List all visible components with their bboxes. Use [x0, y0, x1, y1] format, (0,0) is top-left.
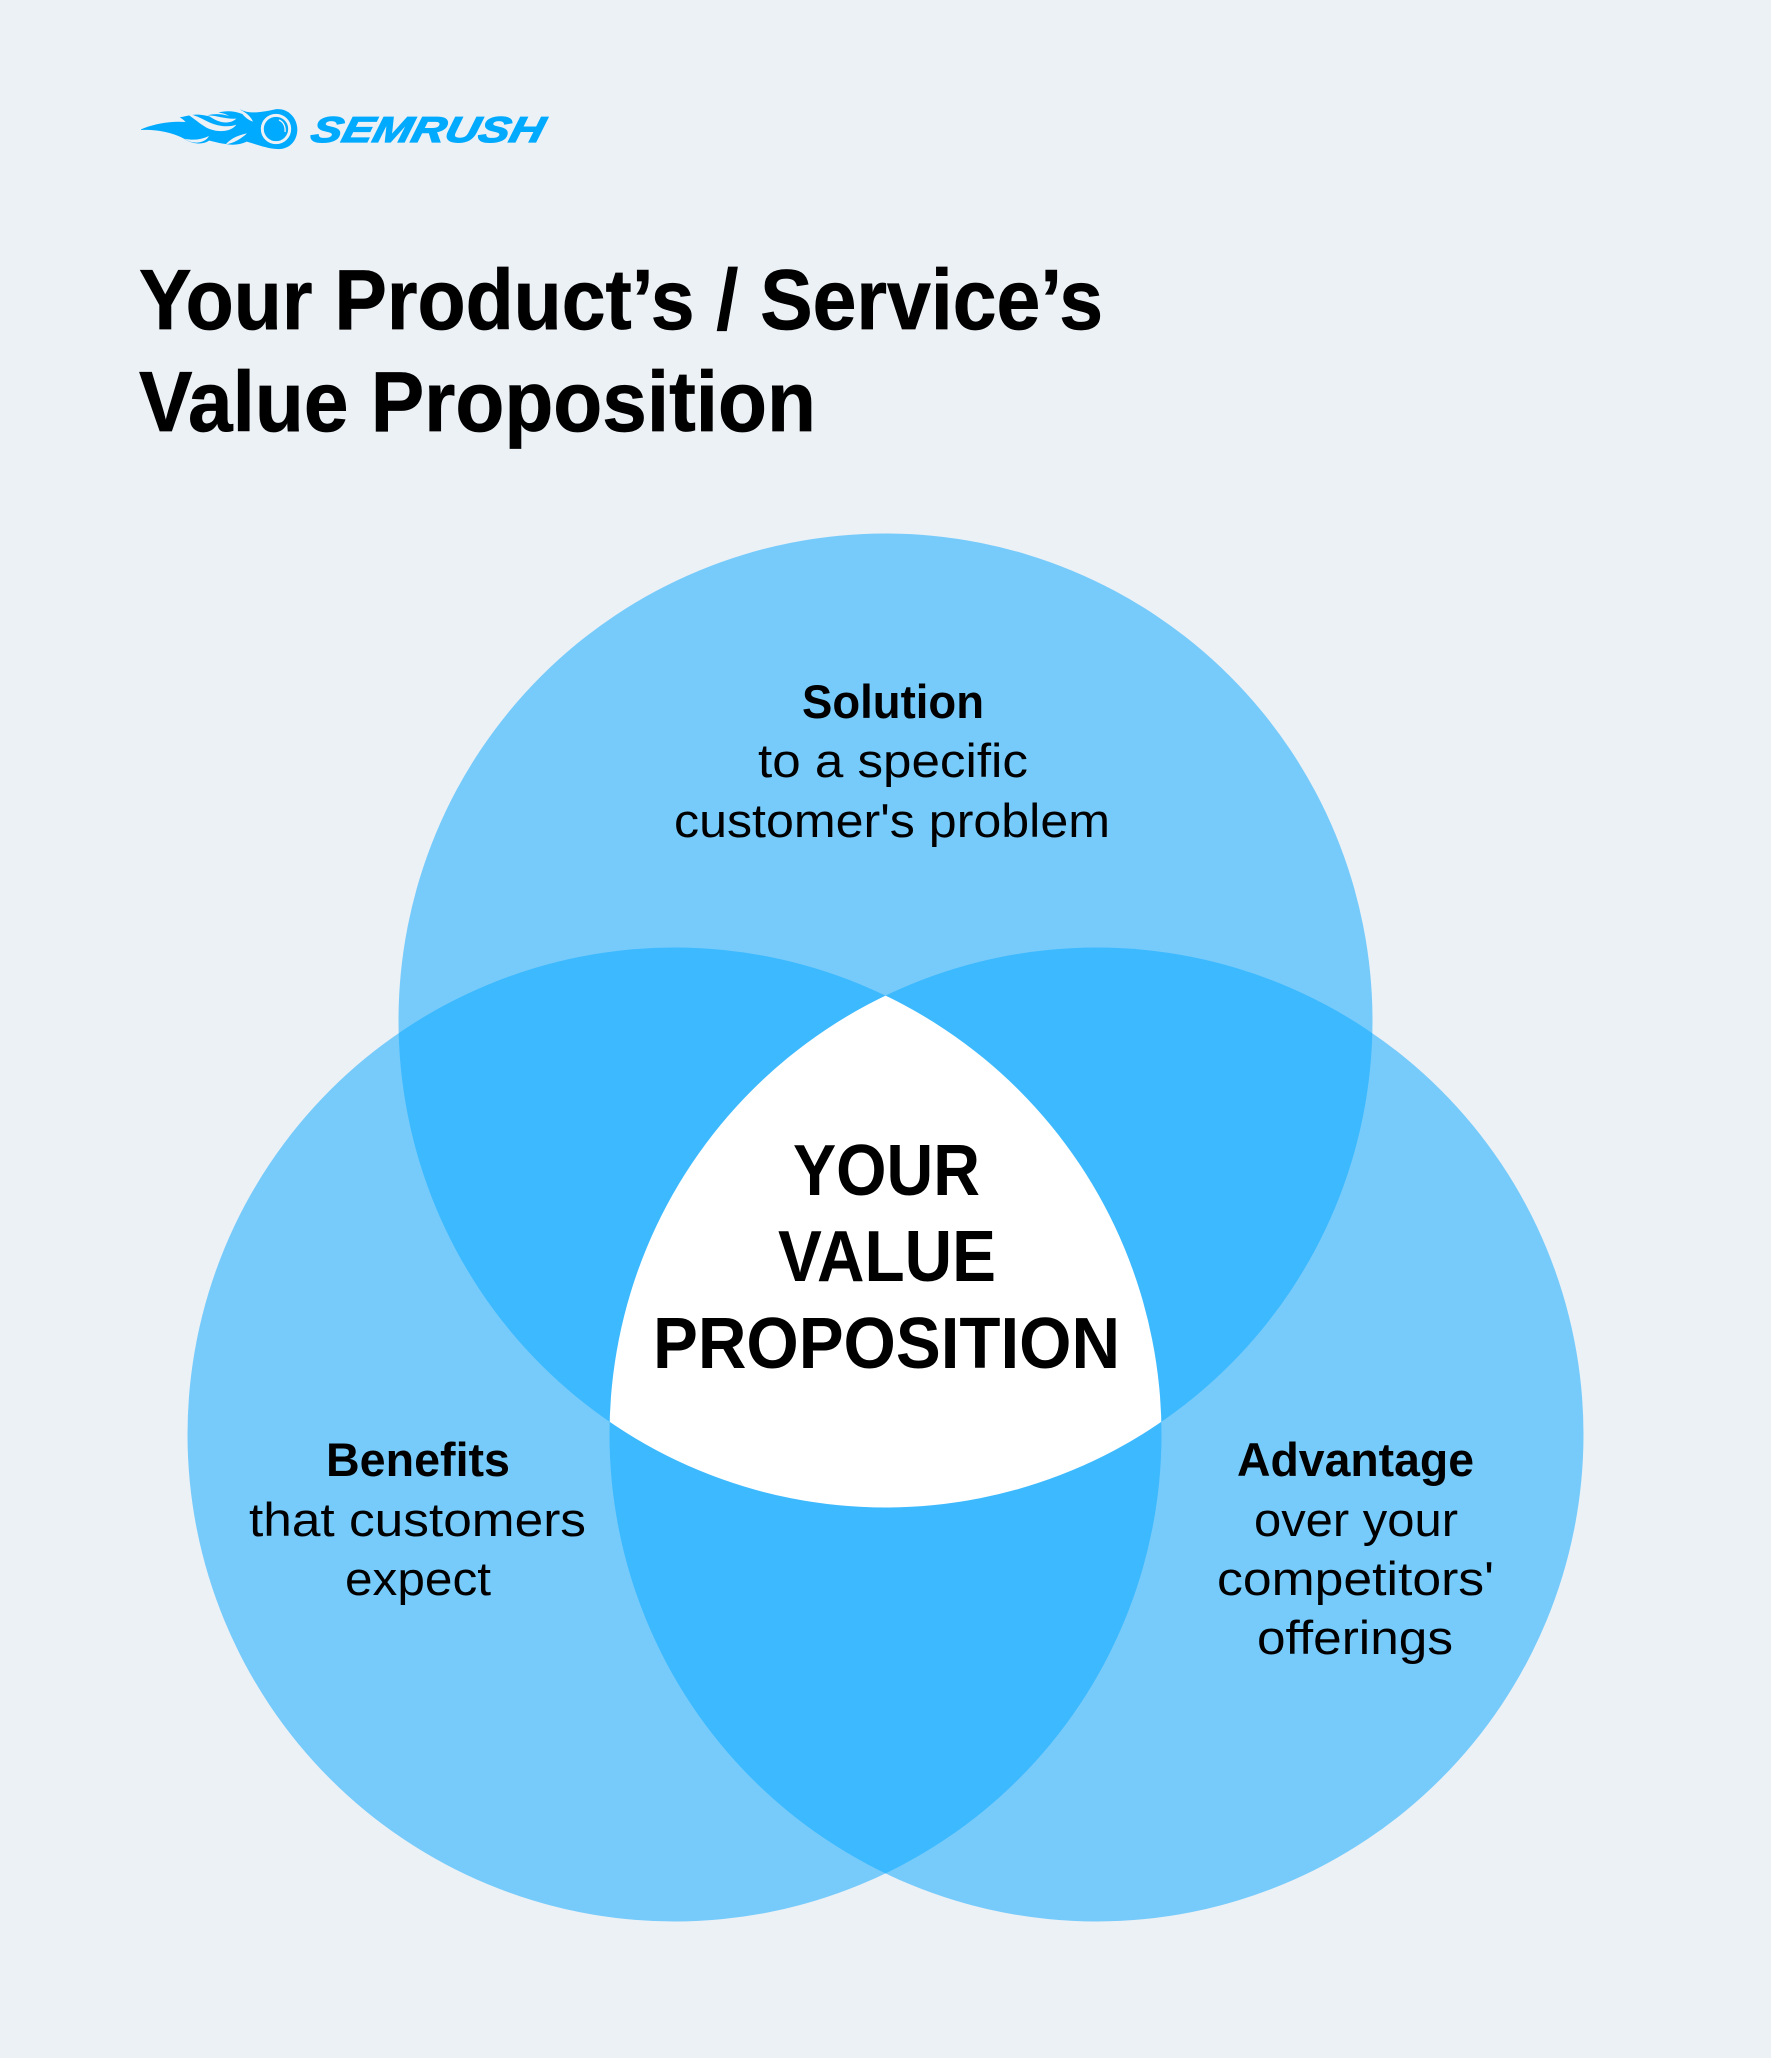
center: triple overlap — [610, 996, 1162, 1508]
label: solution: customer's problem — [674, 794, 1110, 847]
title — [139, 253, 1103, 450]
center text: your value proposition: VALUE — [778, 1217, 996, 1297]
label: advantage: offerings — [1257, 1611, 1453, 1664]
label: benefits — [249, 1433, 586, 1605]
label: benefits: Benefits — [326, 1433, 510, 1486]
icon: flaming ball — [141, 109, 297, 149]
center text: your value proposition — [653, 1131, 1120, 1384]
label: advantage: Advantage — [1237, 1433, 1474, 1486]
label: solution — [674, 675, 1110, 847]
circle: advantage — [610, 948, 1584, 1922]
label: benefits: that customers — [249, 1493, 586, 1546]
label: solution: Solution — [802, 675, 984, 728]
overlap: solution and benefits — [398, 948, 886, 1422]
venn diagram — [188, 534, 1584, 1922]
title: Value Proposition — [139, 355, 816, 450]
logo wordmark: SEMRUSH — [307, 110, 551, 150]
center text: your value proposition: PROPOSITION — [653, 1304, 1120, 1384]
label: advantage: over your — [1254, 1493, 1458, 1546]
label: advantage: competitors' — [1217, 1552, 1494, 1605]
label: advantage — [1217, 1433, 1494, 1664]
circle: solution — [398, 534, 1372, 1508]
circle: benefits — [188, 948, 1162, 1922]
center text: your value proposition: YOUR — [793, 1131, 980, 1211]
overlap: benefits and advantage — [610, 1422, 1162, 1874]
label: benefits: expect — [345, 1552, 491, 1605]
title: Your Product’s / Service’s — [139, 253, 1103, 348]
label: solution: to a specific — [758, 734, 1028, 787]
overlap: solution and advantage — [886, 948, 1372, 1422]
logo: Semrush — [141, 109, 551, 150]
